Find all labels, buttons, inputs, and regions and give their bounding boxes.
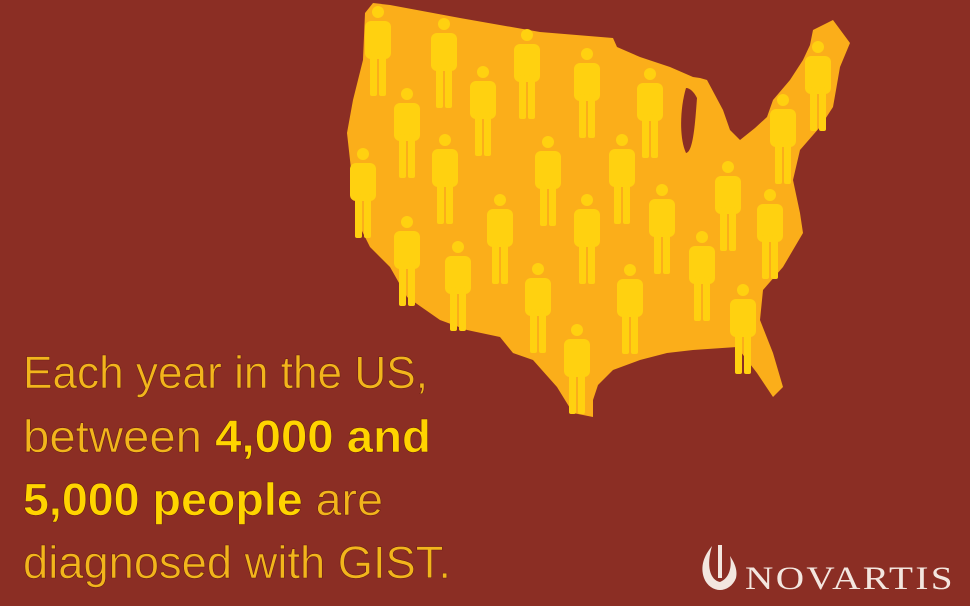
headline text: Each year in the US, <box>23 347 428 398</box>
headline text: 5,000 people are <box>23 474 383 525</box>
logo: Novartis: NOVARTIS <box>745 561 955 597</box>
headline text: between 4,000 and <box>23 411 431 462</box>
people figures <box>350 6 831 414</box>
map: USA <box>347 3 850 417</box>
logo: Novartis <box>702 545 955 597</box>
headline text <box>23 347 451 588</box>
headline text: diagnosed with GIST. <box>23 537 451 588</box>
